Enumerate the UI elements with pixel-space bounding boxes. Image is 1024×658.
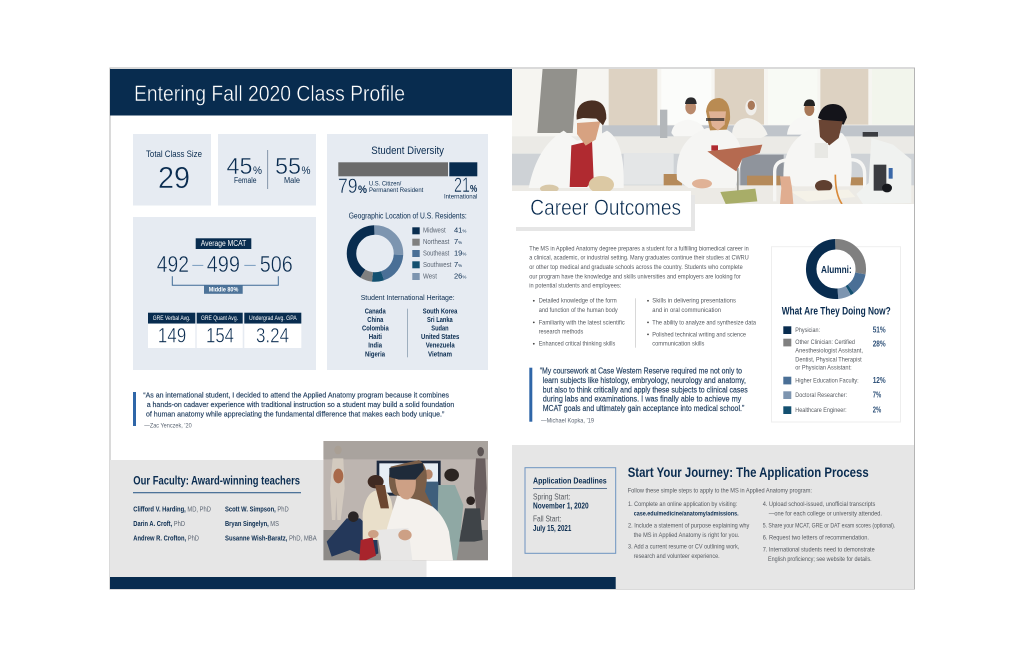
panel: application process: [512, 445, 914, 589]
faculty names: right column: [225, 507, 317, 543]
donut label: Alumni:: [821, 264, 852, 276]
quote: Zac Yenczek: “As an international student, I decided to attend the Applied Anatomy program because it combines: [143, 391, 449, 400]
donut chart: alumni: [811, 244, 861, 294]
bracket: middle 80 percent: [172, 276, 278, 294]
panel: gender split: Male: [284, 176, 301, 185]
country list: right column: United States: [421, 334, 459, 341]
legend row: higher education faculty: 12%: [873, 376, 886, 385]
panel: gender split: Female: [234, 176, 257, 185]
text block: career intro: The MS in Applied Anatomy degree prepares a student for a fulfilling biomedical career in: [529, 245, 749, 252]
legend row: other clinician: 28%: [873, 340, 886, 349]
country list: right column: Vietnam: [428, 351, 452, 358]
steps list: left column: [628, 501, 750, 560]
legend row: physician: Physician:: [795, 327, 820, 334]
bullet list: right column: and in oral communication: [652, 307, 721, 314]
steps list: left column: 3. Add a current resume or CV outlining work,: [628, 544, 739, 551]
legend row: doctoral researcher: Doctoral Researcher:: [795, 392, 847, 399]
bullet list: left column: Familiarity with the latest scientific: [539, 319, 625, 326]
steps list: right column: [763, 501, 895, 563]
bullet list: left column: Detailed knowledge of the form: [539, 298, 617, 305]
stat: GRE verbal: [148, 313, 195, 348]
heading: geographic location: Geographic Location of U.S. Residents:: [349, 211, 467, 220]
legend row: healthcare engineer: [783, 406, 881, 415]
quote: Michael Kopka: “My coursework at Case Western Reserve required me not only to: [540, 367, 742, 376]
stat: 21 percent international: International: [444, 194, 478, 201]
MCAT score range: 492: [157, 251, 189, 277]
faculty names: left column: Clifford V. Harding, MD, PhD: [133, 507, 211, 514]
stat: 79 percent citizens: U.S. Citizen/: [369, 180, 401, 187]
panel: gender split: [218, 134, 316, 206]
text block: career intro: a clinical, academic, or industrial setting. Many graduates continue their studies at CWRU: [529, 255, 749, 262]
donut chart: geographic location: [352, 230, 398, 277]
legend row: physician: 51%: [873, 326, 886, 335]
country list: right column: [421, 308, 459, 358]
stat: 21 percent international: %: [470, 184, 477, 195]
country list: left column: Nigeria: [365, 351, 385, 358]
legend: geographic location: Midwest: [423, 228, 446, 235]
quote: Michael Kopka: MCAT goals and ultimately gain acceptance into medical school.”: [543, 404, 745, 413]
panel: gender split: 55: [275, 153, 301, 179]
country list: left column: [362, 308, 389, 358]
text block: intro to steps: Follow these simple steps to apply to the MS in Applied Anatomy program:: [628, 487, 812, 494]
panel: faculty: [110, 460, 426, 577]
stat: 79 percent citizens: [338, 175, 423, 198]
legend row: healthcare engineer: 2%: [873, 406, 881, 415]
heading: student diversity: Student Diversity: [371, 145, 444, 157]
stat: 21 percent international: [444, 174, 478, 201]
steps list: left column: case.edu/medicine/anatomy/admissions.: [634, 510, 739, 517]
callout: application deadlines: [525, 468, 616, 553]
panel: gender split: 45: [226, 153, 252, 179]
stat: GRE quant: GRE Quant Avg.: [201, 316, 238, 322]
legend: geographic location: 26%: [454, 272, 466, 281]
callout: application deadlines: Application Deadlines: [533, 475, 607, 485]
panel: alumni outcomes: [772, 244, 900, 422]
country list: left column: India: [368, 343, 382, 350]
country list: left column: Canada: [365, 308, 386, 315]
legend row: doctoral researcher: [783, 391, 881, 400]
steps list: left column: 1. Complete an online application by visiting:: [628, 501, 737, 508]
country list: right column: Sudan: [431, 326, 449, 333]
bullet list: left column: Enhanced critical thinking skills: [539, 341, 616, 348]
legend: geographic location: Southwest: [423, 262, 451, 269]
legend: geographic location: 7%: [454, 260, 462, 269]
legend: geographic location: Northeast: [423, 239, 449, 246]
steps list: left column: 2. Include a statement of purpose explaining why: [628, 523, 750, 530]
steps list: right column: 5. Share your MCAT, GRE or DAT exam scores (optional).: [763, 523, 895, 530]
panel: test scores: [133, 217, 316, 370]
steps list: right column: English proficiency; see website for details.: [768, 556, 872, 563]
callout: application deadlines: November 1, 2020: [533, 502, 589, 511]
callout: application deadlines: July 15, 2021: [533, 524, 572, 533]
stat: 21 percent international: 21: [454, 174, 470, 197]
stat: GRE verbal: 149: [158, 324, 186, 347]
legend row: higher education faculty: [783, 376, 886, 385]
bullet list: right column: Polished technical writing and science: [652, 331, 746, 338]
steps list: right column: —one for each college or university attended.: [769, 510, 882, 517]
legend row: other clinician: Dentist, Physical Therapist: [795, 356, 862, 363]
country list: left column: China: [367, 317, 383, 324]
faculty names: right column: Susanne Wish-Baratz, PhD, MBA: [225, 536, 317, 543]
stat: undergrad GPA: 3.24: [256, 324, 289, 347]
bullet list: left column: research methods: [539, 329, 584, 336]
heading: faculty: Our Faculty: Award-winning teachers: [133, 476, 300, 488]
steps list: left column: the MS in Applied Anatomy is right for you.: [634, 532, 739, 539]
legend: geographic location: Southeast: [423, 250, 449, 257]
panel: total class size: 29: [158, 160, 190, 195]
MCAT score range: 506: [260, 251, 293, 277]
callout: application deadlines: Fall Start:: [533, 515, 561, 524]
quote: Michael Kopka: but also to think critically and apply these subjects to clinical cases: [543, 385, 748, 394]
stat: GRE verbal: GRE Verbal Avg.: [153, 316, 191, 322]
panel: total class size: [133, 134, 211, 206]
stat: 79 percent citizens: Permanent Resident: [369, 187, 423, 194]
steps list: left column: research and volunteer experience.: [634, 553, 720, 560]
quote: Zac Yenczek: —Zac Yenczek, ’20: [144, 423, 192, 429]
bullet list: left column: [533, 298, 625, 348]
stat: undergrad GPA: [244, 313, 301, 348]
heading: international heritage: Student International Heritage:: [361, 293, 455, 302]
quote: Zac Yenczek: of human anatomy while appreciating the fundamental difference that makes each body unique.”: [146, 409, 445, 418]
heading: start your journey: Start Your Journey: The Application Process: [628, 465, 869, 480]
faculty names: left column: Andrew R. Crofton, PhD: [133, 536, 199, 543]
panel: total class size: Total Class Size: [146, 149, 202, 160]
stacked bar: citizen vs international: [338, 162, 477, 176]
faculty names: right column: Scott W. Simpson, PhD: [225, 507, 289, 514]
panel: gender split: %: [253, 165, 262, 177]
legend row: higher education faculty: Higher Education Faculty:: [795, 377, 859, 384]
callout: application deadlines: Spring Start:: [533, 493, 570, 502]
legend row: other clinician: Anesthesiologist Assistant,: [795, 348, 863, 355]
bullet list: right column: The ability to analyze and synthesize data: [652, 319, 756, 326]
legend: geographic location: 19%: [454, 248, 466, 257]
country list: right column: South Korea: [423, 308, 457, 315]
title banner: [110, 69, 512, 116]
quote: Michael Kopka: during labs and examinations. I was finally able to achieve my: [543, 395, 741, 404]
MCAT score range: [157, 251, 293, 277]
stat: GRE quant: 154: [206, 324, 234, 347]
faculty names: right column: Bryan Singelyn, MS: [225, 521, 279, 528]
legend: geographic location: West: [423, 274, 437, 281]
bullet list: right column: [647, 298, 756, 348]
country list: right column: Venezuela: [426, 343, 455, 350]
panel: student diversity: [327, 134, 488, 370]
bullet list: left column: and function of the human body: [539, 307, 618, 314]
quote: Zac Yenczek: a hands-on cadaver experience with traditional instruction so a student may build a solid foundation: [147, 400, 454, 409]
steps list: right column: 6. Request two letters of recommendation.: [763, 535, 869, 542]
panel: gender split: %: [302, 165, 311, 177]
legend row: other clinician: [783, 339, 886, 372]
panel: career outcomes heading: [512, 191, 695, 231]
faculty names: left column: Darin A. Croft, PhD: [133, 521, 185, 528]
legend: geographic location: 41%: [454, 226, 466, 235]
quote: Michael Kopka: [529, 367, 748, 424]
steps list: right column: 4. Upload school-issued, unofficial transcripts: [763, 501, 876, 508]
photo: student wearing headset: [323, 441, 488, 560]
title banner: Entering Fall 2020 Class Profile: [134, 81, 405, 106]
bullet list: right column: Skills in delivering presentations: [652, 298, 737, 305]
photo: students in anatomy lab: [512, 68, 914, 205]
legend row: doctoral researcher: 7%: [873, 391, 881, 400]
panel: career outcomes heading: Career Outcomes: [530, 195, 681, 220]
footer band: [110, 577, 616, 589]
legend row: healthcare engineer: Healthcare Engineer:: [795, 407, 847, 414]
text block: career intro: or other top medical and graduate schools across the country. Students who complete: [529, 264, 743, 271]
legend: geographic location: [412, 226, 466, 281]
legend row: other clinician: or Physician Assistant:: [795, 365, 852, 372]
text block: career intro: our program have the knowledge and skills universities and employers are looking for: [529, 273, 741, 280]
quote: Zac Yenczek: [133, 391, 454, 429]
bullet list: right column: communication skills: [652, 341, 705, 348]
steps list: right column: 7. International students need to demonstrate: [763, 547, 875, 554]
stat: GRE quant: [197, 313, 243, 348]
stat: 79 percent citizens: %: [358, 184, 367, 196]
country list: left column: Colombia: [362, 326, 389, 333]
legend row: other clinician: Other Clinician: Certified: [795, 339, 855, 346]
country list: left column: Haiti: [369, 334, 382, 341]
stat: undergrad GPA: Undergrad Avg. GPA: [249, 316, 297, 322]
label: average MCAT: Average MCAT: [201, 239, 246, 248]
legend: geographic location: 7%: [454, 237, 462, 246]
legend row: physician: [783, 326, 886, 335]
text block: career intro: [529, 245, 749, 290]
stat: 79 percent citizens: 79: [338, 175, 358, 198]
quote: Michael Kopka: learn subjects like histology, embryology, neurology and anatomy,: [543, 376, 746, 385]
faculty names: left column: [133, 507, 211, 543]
quote: Michael Kopka: —Michael Kopka, ’19: [541, 418, 595, 424]
MCAT score range: 499: [207, 251, 240, 277]
country list: right column: Sri Lanka: [427, 317, 453, 324]
text block: career intro: in potential students and employees:: [529, 283, 621, 290]
bracket: middle 80 percent: Middle 80%: [209, 287, 239, 293]
heading: what are they doing now: What Are They Doing Now?: [782, 306, 891, 318]
